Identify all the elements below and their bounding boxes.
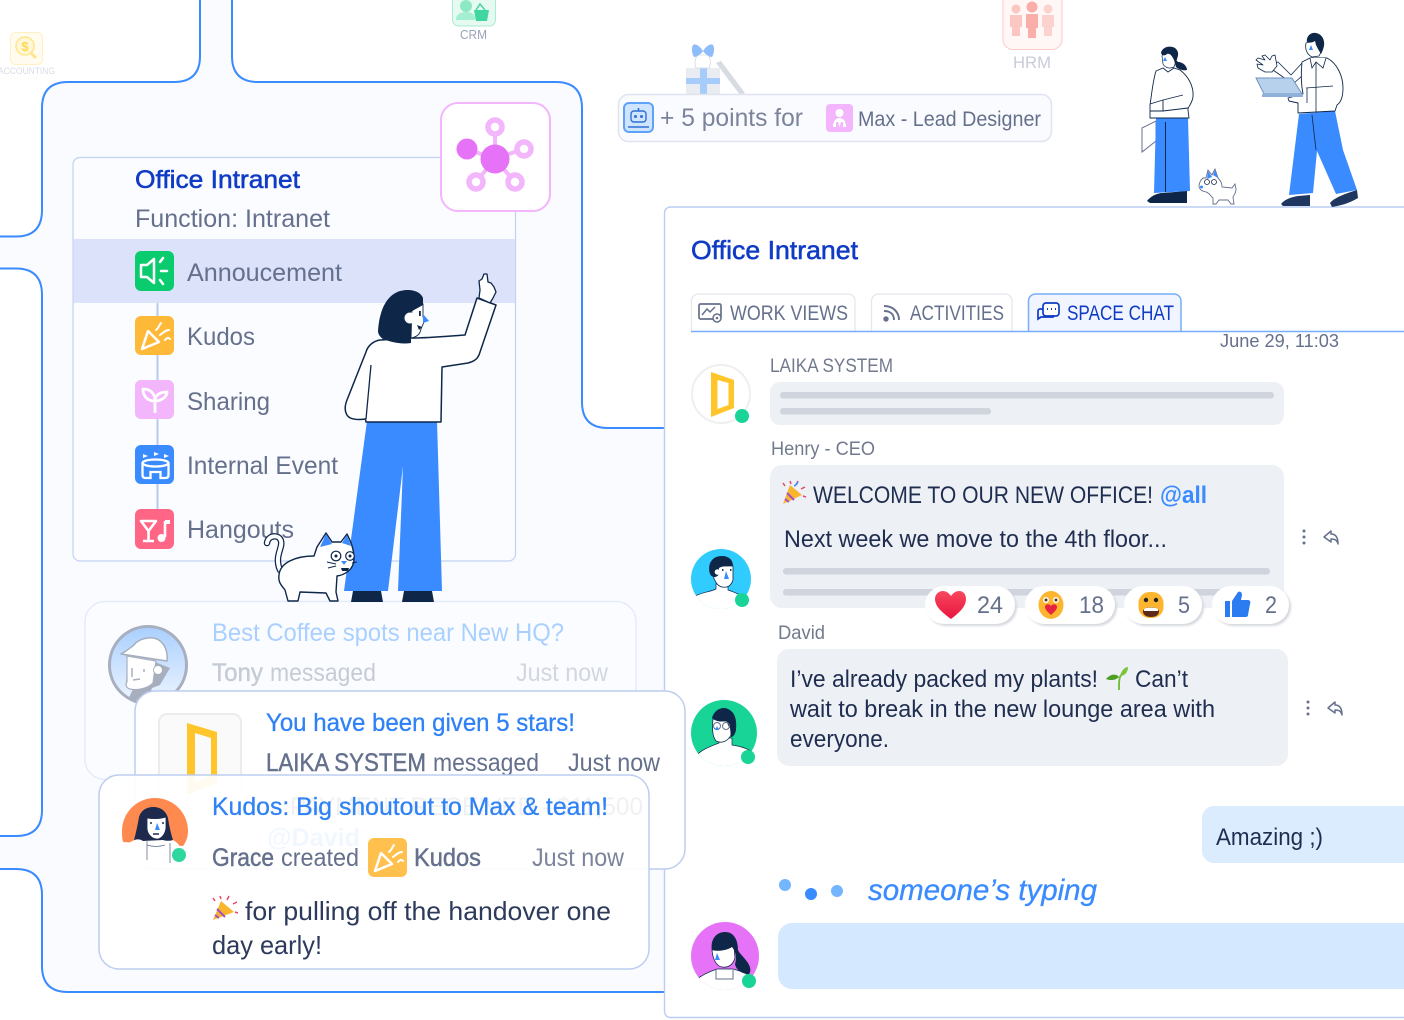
message input box bbox=[778, 923, 1404, 989]
hair bbox=[378, 290, 423, 344]
notification card: best coffee spots bbox=[85, 602, 636, 780]
message: laika system: LAIKA SYSTEM bbox=[770, 356, 893, 377]
illustration: dog bbox=[1199, 169, 1236, 204]
faded module icon: HRM: HRM bbox=[1013, 53, 1051, 72]
notification card: kudos: Kudos: Big shoutout to Max & team! bbox=[212, 793, 608, 821]
illustration: man with laptop bbox=[1256, 33, 1358, 207]
message: david: everyone. bbox=[790, 726, 889, 753]
message: david bbox=[691, 623, 1342, 768]
notification card: kudos: Grace bbox=[212, 844, 274, 872]
notification card: best coffee spots: messaged bbox=[270, 659, 376, 687]
menu item: kudos: Kudos bbox=[187, 323, 255, 351]
hair bbox=[1307, 33, 1324, 54]
chat window title: Office Intranet bbox=[691, 235, 859, 265]
icon: robot bbox=[624, 103, 653, 132]
message: henry ceo bbox=[691, 439, 1338, 624]
icon: kudos bbox=[368, 838, 407, 877]
avatar: current user bbox=[691, 922, 759, 992]
notification card: kudos bbox=[99, 775, 649, 969]
menu item: sharing: Sharing bbox=[187, 388, 270, 416]
document bbox=[1142, 121, 1156, 152]
illustration: woman reaching up bbox=[344, 274, 496, 602]
tab: work views: WORK VIEWS bbox=[730, 302, 848, 325]
menu heading: Office Intranet bbox=[135, 166, 300, 194]
panel: office intranet menu bbox=[73, 158, 516, 561]
notification card: kudos: day early! bbox=[212, 930, 322, 960]
tab: activities: ACTIVITIES bbox=[910, 302, 1004, 325]
reaction: hug 18: 18 bbox=[1079, 592, 1104, 619]
illustration: gift box bbox=[686, 44, 745, 95]
notification card: five stars: PAYMENT RECEIVED - $11,500 bbox=[290, 793, 643, 821]
message: my reply: Amazing ;) bbox=[1216, 824, 1323, 851]
message: henry ceo: @all bbox=[1160, 482, 1207, 509]
hair bbox=[1161, 47, 1187, 70]
faded module icon: CRM: CRM bbox=[460, 27, 487, 42]
nose bbox=[423, 314, 429, 323]
shoes bbox=[1147, 191, 1187, 203]
tab: activities bbox=[872, 294, 1012, 331]
tab: work views bbox=[692, 294, 855, 331]
laptop bbox=[1256, 78, 1302, 94]
avatar: grace bbox=[122, 798, 188, 865]
notification card: five stars: @David bbox=[267, 824, 360, 852]
message: david: I’ve already packed my plants! bbox=[790, 666, 1098, 693]
trousers bbox=[1289, 111, 1357, 195]
reaction: hug 18 bbox=[1025, 586, 1115, 624]
reaction: heart 24 bbox=[925, 586, 1015, 624]
illustration: cat bbox=[267, 533, 357, 601]
notification card: kudos: Just now bbox=[532, 844, 625, 872]
reaction: thumbs up 2 bbox=[1212, 586, 1289, 624]
notification card: kudos: created bbox=[281, 844, 359, 872]
menu item: announcement bbox=[135, 251, 342, 291]
notification card: five stars bbox=[135, 691, 685, 869]
nose bbox=[1309, 45, 1313, 50]
icon: laika logo bbox=[159, 714, 241, 798]
notification card: five stars: Just now bbox=[568, 749, 661, 777]
nose bbox=[1163, 57, 1167, 61]
icon: intranet network bbox=[441, 103, 550, 211]
shirt bbox=[1150, 68, 1193, 118]
face bbox=[411, 304, 424, 338]
avatar: laika bbox=[692, 365, 750, 423]
message: my reply bbox=[1202, 806, 1404, 863]
menu item: hangouts bbox=[135, 509, 294, 549]
faded module icon: CRM bbox=[452, 0, 496, 42]
message actions bbox=[1302, 530, 1338, 544]
tab: space chat (active) bbox=[1028, 294, 1181, 331]
points notification bar: + 5 points for bbox=[660, 104, 803, 132]
icon: party popper bbox=[783, 481, 806, 504]
illustration: woman with document bbox=[1142, 47, 1193, 203]
points notification bar bbox=[618, 94, 1052, 142]
panel: space chat window bbox=[664, 207, 1404, 1018]
faded module icon: HRM bbox=[1003, 0, 1062, 72]
message: henry ceo: Henry - CEO bbox=[771, 439, 875, 460]
road-shaped background panel bbox=[0, 0, 664, 992]
points notification bar: Max - Lead Designer bbox=[858, 108, 1041, 131]
menu item: kudos bbox=[135, 316, 255, 355]
face bbox=[1162, 50, 1177, 68]
trousers bbox=[1154, 118, 1190, 193]
icon: party popper bbox=[213, 896, 238, 920]
menu subheading: Function: Intranet bbox=[135, 205, 330, 233]
trousers bbox=[344, 421, 442, 591]
message: david: Can’t bbox=[1135, 666, 1188, 693]
message: henry ceo: Next week we move to the 4th floor... bbox=[784, 526, 1167, 553]
avatar: henry bbox=[691, 549, 751, 612]
message: david: David bbox=[778, 623, 825, 644]
menu item: sharing bbox=[135, 380, 270, 419]
faded module icon: accounting: $ bbox=[21, 39, 29, 54]
menu item: internal event bbox=[135, 445, 338, 484]
reaction: wow 5: 5 bbox=[1178, 592, 1190, 619]
face bbox=[1306, 38, 1322, 57]
avatar: david bbox=[691, 700, 758, 768]
icon: person badge bbox=[826, 104, 853, 132]
notification card: kudos: Kudos bbox=[414, 844, 481, 872]
shirt and arm bbox=[345, 298, 496, 422]
icon: sprout bbox=[1106, 667, 1128, 690]
notification card: best coffee spots: Tony bbox=[212, 659, 263, 687]
menu item: hangouts: Hangouts bbox=[187, 516, 294, 544]
notification card: five stars: messaged bbox=[433, 749, 539, 777]
notification card: five stars: LAIKA SYSTEM bbox=[266, 749, 426, 777]
timestamp: June 29, 11:03 bbox=[1220, 331, 1339, 351]
tab: space chat (active): SPACE CHAT bbox=[1067, 302, 1174, 325]
message: david: wait to break in the new lounge area with bbox=[789, 696, 1215, 723]
shirt bbox=[1288, 58, 1343, 113]
message: henry ceo: WELCOME TO OUR NEW OFFICE! bbox=[813, 482, 1153, 509]
reaction: wow 5 bbox=[1124, 586, 1202, 624]
message: laika system bbox=[692, 356, 1284, 425]
hand bbox=[1256, 55, 1277, 72]
menu item: announcement: Annoucement bbox=[187, 259, 342, 287]
reaction: heart 24: 24 bbox=[977, 592, 1003, 619]
shoes bbox=[351, 591, 434, 602]
typing indicator: someone’s typing bbox=[868, 874, 1097, 907]
reaction: thumbs up 2: 2 bbox=[1265, 592, 1277, 619]
notification card: kudos: for pulling off the handover one bbox=[245, 896, 611, 926]
notification card: best coffee spots: Best Coffee spots near New HQ? bbox=[212, 619, 564, 647]
raised arm bbox=[1273, 62, 1303, 84]
notification card: best coffee spots: Just now bbox=[516, 659, 609, 687]
raised hand bbox=[479, 274, 496, 303]
menu item: internal event: Internal Event bbox=[187, 452, 338, 480]
message actions bbox=[1306, 700, 1342, 716]
avatar: tony bbox=[110, 626, 186, 704]
faded module icon: accounting bbox=[0, 32, 55, 76]
notification card: five stars: You have been given 5 stars! bbox=[266, 709, 575, 737]
shoes bbox=[1281, 195, 1310, 206]
